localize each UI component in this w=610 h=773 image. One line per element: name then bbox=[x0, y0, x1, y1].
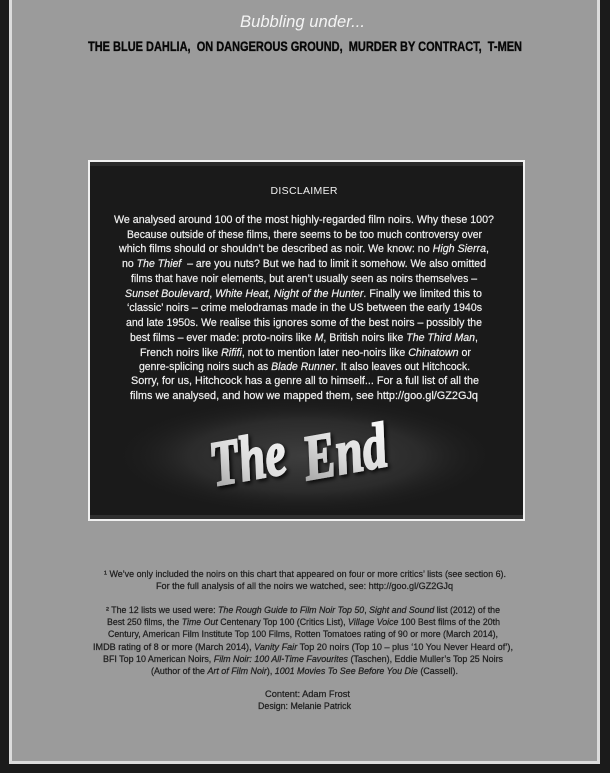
the end title: End bbox=[296, 409, 393, 494]
footnote 2: IMDB rating of 8 or more (March 2014), Vanity Fair Top 20 noirs (Top 10 – plus ‘10 You Never Heard of’), bbox=[93, 642, 513, 652]
disclaimer body text: films that have noir elements, but aren’t usually seen as noirs themselves – bbox=[131, 273, 477, 285]
footnote 1: For the full analysis of all the noirs we watched, see: http://goo.gl/GZ2GJq bbox=[156, 581, 453, 591]
footnote 2 bbox=[93, 605, 513, 676]
footnote 2: (Author of the Art of Film Noir), 1001 Movies To See Before You Die (Cassell). bbox=[151, 666, 458, 676]
disclaimer body text: ‘classic’ noirs – crime melodramas made in the US between the early 1940s bbox=[127, 302, 483, 314]
the end title: The bbox=[204, 417, 291, 500]
footnote 2: ² The 12 lists we used were: The Rough Guide to Film Noir Top 50, Sight and Sound list (2012) of the bbox=[106, 605, 500, 615]
film list: THE BLUE DAHLIA, ON DANGEROUS GROUND, MURDER BY CONTRACT, T-MEN bbox=[88, 39, 522, 54]
panel background bbox=[88, 160, 525, 521]
credits: Design: Melanie Patrick bbox=[258, 701, 351, 711]
disclaimer body text: Because outside of these films, there seems to be too much controversy over bbox=[127, 229, 482, 241]
credits bbox=[258, 689, 351, 711]
footnote 1 bbox=[104, 569, 506, 591]
disclaimer title: DISCLAIMER bbox=[270, 185, 338, 197]
the end title bbox=[204, 409, 393, 500]
disclaimer body text: French noirs like Rififi, not to mention later neo-noirs like Chinatown or bbox=[140, 347, 471, 359]
panel: disclaimer bbox=[88, 160, 525, 521]
disclaimer body text: which films should or shouldn’t be described as noir. We know: no High Sierra, bbox=[118, 243, 489, 255]
footnote 1: ¹ We’ve only included the noirs on this chart that appeared on four or more critics’ lists (see section 6). bbox=[104, 569, 506, 579]
disclaimer body text: films we analysed, and how we mapped them, see http://goo.gl/GZ2GJq bbox=[130, 390, 478, 402]
footnote 2: BFI Top 10 American Noirs, Film Noir: 100 All-Time Favourites (Taschen), Eddie Muller’s Top 25 Noirs bbox=[103, 654, 503, 664]
disclaimer body text: no The Thief – are you nuts? But we had to limit it somehow. We also omitted bbox=[122, 258, 486, 270]
disclaimer body text: We analysed around 100 of the most highly-regarded film noirs. Why these 100? bbox=[114, 214, 494, 226]
disclaimer body text: and late 1950s. We realise this ignores some of the best noirs – possibly the bbox=[126, 317, 482, 329]
disclaimer body text bbox=[114, 214, 494, 402]
credits: Content: Adam Frost bbox=[265, 689, 351, 699]
disclaimer body text: best films – ever made: proto-noirs like M, British noirs like The Third Man, bbox=[130, 332, 478, 344]
disclaimer body text: Sorry, for us, Hitchcock has a genre all to himself... For a full list of all the bbox=[131, 375, 479, 387]
disclaimer body text: genre-splicing noirs such as Blade Runner. It also leaves out Hitchcock. bbox=[139, 361, 470, 373]
disclaimer body text: Sunset Boulevard, White Heat, Night of the Hunter. Finally we limited this to bbox=[125, 288, 482, 300]
heading: bubbling under: Bubbling under... bbox=[240, 12, 365, 31]
footnote 2: Best 250 films, the Time Out Centenary Top 100 (Critics List), Village Voice 100 Best films of the 20th bbox=[107, 617, 500, 627]
footnote 2: Century, American Film Institute Top 100 Films, Rotten Tomatoes rating of 90 or more (March 2014), bbox=[108, 629, 498, 639]
